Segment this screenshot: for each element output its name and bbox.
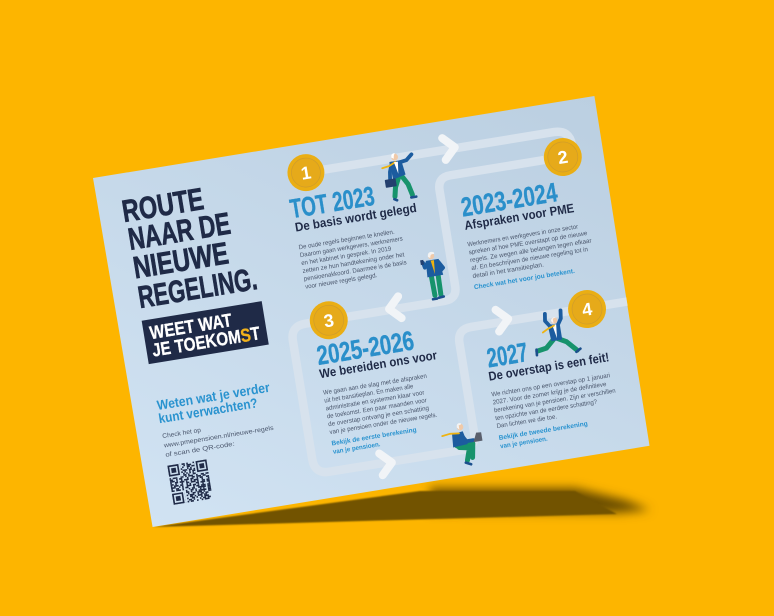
step 2 badge bbox=[541, 135, 585, 179]
panel: step 3 text: 2025-2026 bbox=[315, 326, 416, 371]
step 4 badge bbox=[565, 287, 609, 331]
route arrow 4 bbox=[496, 308, 510, 332]
slogan box: WEET WAT bbox=[148, 309, 234, 343]
QR instructions: of scan de QR-code: bbox=[165, 441, 235, 459]
route arrow 2 bbox=[387, 296, 402, 320]
panel: step 1 text: Daarom gaan werkgevers, werknemers bbox=[300, 236, 403, 259]
QR code bbox=[167, 459, 213, 505]
panel: step 3 text: de toekomst. Een paar maanden voor bbox=[326, 397, 428, 420]
panel: step 4 text: berekening van je pensioen. Zijn er verschillen bbox=[494, 388, 617, 414]
card shadow bbox=[153, 488, 650, 527]
panel: step 3 text: We gaan aan de slag met de afspraken bbox=[323, 373, 428, 397]
panel: step 1 text: en het kabinet in gesprek. In 2019 bbox=[301, 245, 392, 267]
QR instructions: Check het op bbox=[162, 427, 202, 440]
flyer card bbox=[93, 96, 651, 527]
panel: step 2 text: Check wat het voor jou betekent. bbox=[474, 268, 576, 291]
panel: step 3 text: uit het transitieplan. En maken alle bbox=[324, 383, 414, 405]
panel: step 1 text: TOT 2023 bbox=[288, 181, 377, 224]
title bbox=[120, 175, 260, 315]
panel: step 1 text: De basis wordt gelegd bbox=[294, 201, 418, 235]
panel: step 3 text: van je pensioen. bbox=[332, 441, 381, 456]
panel: step 4 text: We richten ons op een overstap op 1 januari bbox=[491, 372, 611, 399]
question heading: Weten wat je verder bbox=[156, 380, 271, 413]
step 1 badge: 1 bbox=[299, 162, 313, 184]
panel: step 4 text: Dan lichten we die toe. bbox=[496, 413, 558, 430]
panel: step 2 text: detail in het transitieplan. bbox=[472, 261, 545, 280]
step 3 badge: 3 bbox=[322, 310, 335, 331]
panel: step 1 text: De oude regels beginnen te knellen. bbox=[298, 229, 395, 251]
panel: step 4 text: Bekijk de tweede berekening bbox=[498, 421, 588, 442]
icon: standing man with phone bbox=[419, 250, 448, 300]
icon: walking businessman with briefcase bbox=[380, 150, 418, 202]
panel: step 4 text: 2027. Voor de zomer krijg je de definitieve bbox=[492, 381, 607, 406]
route arrow 3 bbox=[379, 452, 394, 475]
QR instructions: www.pmepensioen.nl/nieuwe-regels bbox=[162, 425, 274, 450]
slogan box: JE TOEKOMST bbox=[151, 322, 262, 361]
icon: seated man with laptop bbox=[441, 420, 486, 468]
panel: step 4 text bbox=[483, 324, 622, 450]
route track bbox=[266, 125, 646, 474]
title: NAAR DE bbox=[126, 206, 233, 257]
panel: step 1 text: zetten ze hun handtekening onder het bbox=[302, 251, 405, 275]
panel: step 1 text bbox=[288, 174, 427, 291]
icon: jumping man bbox=[530, 308, 581, 358]
step 1 badge bbox=[285, 151, 327, 194]
QR instructions bbox=[161, 415, 276, 459]
panel: step 3 text: de overstap ontvang je een schatting bbox=[328, 405, 430, 428]
question heading: kunt verwachten? bbox=[158, 395, 259, 426]
title: ROUTE bbox=[120, 181, 206, 229]
panel: step 2 text: spreken af hoe PME overstapt op de nieuwe bbox=[468, 230, 588, 256]
panel: step 4 text: ten opzichte van de eerdere schatting? bbox=[495, 399, 598, 422]
panel: step 2 text: Afspraken voor PME bbox=[463, 201, 575, 233]
panel: step 3 text: van je pensioen onder de nieuwe regels. bbox=[329, 412, 438, 436]
panel: step 4 text: De overstap is een feit! bbox=[488, 350, 610, 384]
panel: step 3 text: Bekijk de eerste berekening bbox=[331, 427, 417, 447]
panel: step 3 text: We bereiden ons voor bbox=[318, 348, 438, 381]
panel: step 3 text: administratie en systemen klaar voor bbox=[325, 389, 426, 412]
step 3 badge bbox=[307, 298, 351, 342]
route arrow 1 bbox=[442, 136, 457, 160]
panel: step 1 text: pensioenakkoord. Daarmee is de basis bbox=[303, 259, 407, 283]
question heading bbox=[155, 380, 274, 426]
panel: step 2 text: af. En beschrijven de nieuwe regeling tot in bbox=[471, 246, 589, 272]
step 4 badge: 4 bbox=[581, 299, 594, 320]
step 2 badge: 2 bbox=[556, 147, 569, 168]
title: REGELING. bbox=[135, 261, 260, 315]
panel: step 3 text bbox=[314, 322, 450, 456]
title: NIEUWE bbox=[131, 235, 231, 285]
panel: step 4 text: van je pensioen. bbox=[500, 436, 548, 450]
panel: step 2 text: Werknemers en werkgevers in onze sector bbox=[467, 223, 579, 248]
panel: step 2 text bbox=[459, 173, 597, 291]
panel: step 1 text: voor nieuwe regels gelegd. bbox=[305, 272, 378, 291]
panel: step 2 text: regels. Ze wegen alle belangen tegen elkaar bbox=[470, 237, 593, 264]
slogan box bbox=[142, 301, 269, 364]
panel: step 4 text: 2027 bbox=[485, 337, 530, 373]
panel: step 2 text: 2023-2024 bbox=[459, 177, 560, 222]
